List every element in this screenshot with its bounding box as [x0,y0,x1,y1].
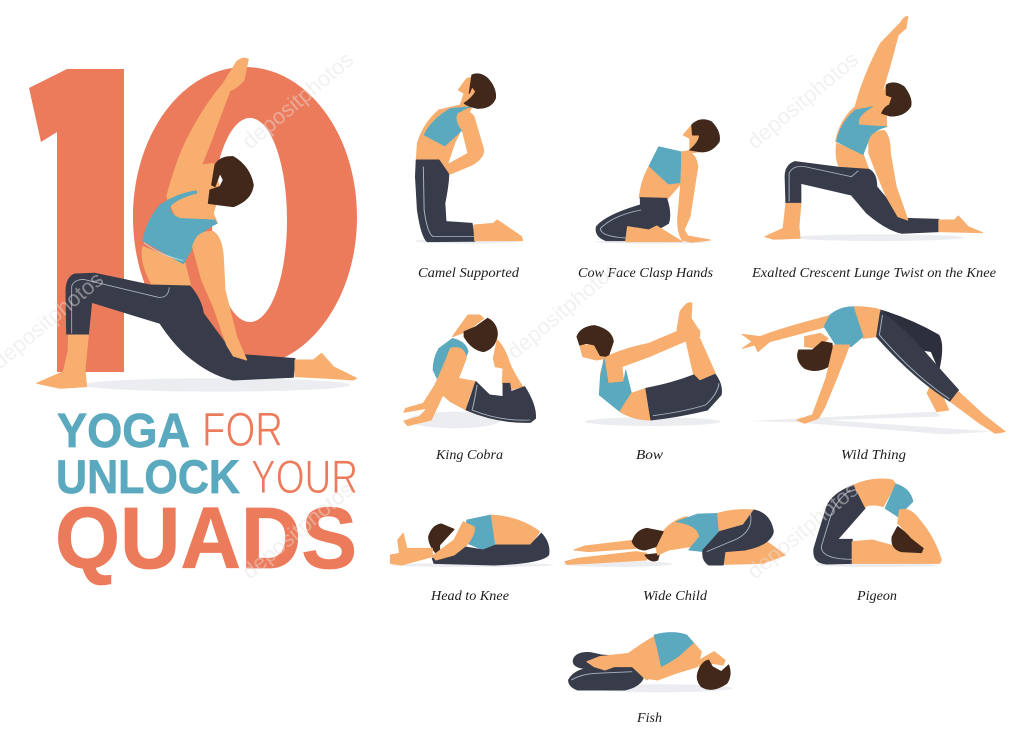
title: yoga for unlock your quads [55,404,358,587]
watermark text: depositphotos [237,477,358,584]
pose: wild thing [742,307,1005,434]
caption: wild thing: Wild Thing [841,447,906,462]
watermark text: depositphotos [742,477,863,584]
caption: king cobra: King Cobra [435,447,503,462]
pose: exalted crescent lunge twist on the knee [765,16,982,241]
caption: pigeon: Pigeon [856,588,897,603]
caption: cow face clasp hands: Cow Face Clasp Hands [578,265,713,280]
caption: exalted crescent lunge twist on the knee: Exalted Crescent Lunge Twist on the Knee [751,265,996,280]
watermark text: depositphotos [237,47,358,154]
pose: king cobra [404,315,535,428]
caption: bow: Bow [636,447,663,462]
title: yoga for unlock your quads: FOR [202,404,283,457]
pose: pigeon [814,479,941,567]
caption: camel supported: Camel Supported [418,265,519,280]
pose: head to knee [390,515,554,567]
watermark text [0,47,863,584]
title: yoga for unlock your quads: QUADS [55,490,357,587]
pose: bow [577,303,721,426]
figure: large crescent lunge [37,58,357,392]
caption: wide child: Wide Child [643,588,707,603]
pose: fish [569,632,732,692]
big number 10 [29,67,357,372]
title: yoga for unlock your quads: YOGA [57,405,190,458]
caption: head to knee: Head to Knee [430,588,509,603]
watermark text: depositphotos [502,257,623,364]
caption: fish: Fish [636,710,662,725]
pose: camel supported [416,74,523,244]
title: yoga for unlock your quads: UNLOCK [56,450,240,503]
pose: cow face clasp hands [595,120,719,244]
watermark text: depositphotos [742,47,863,154]
pose: wide child [563,510,785,567]
title: yoga for unlock your quads: YOUR [251,450,358,503]
